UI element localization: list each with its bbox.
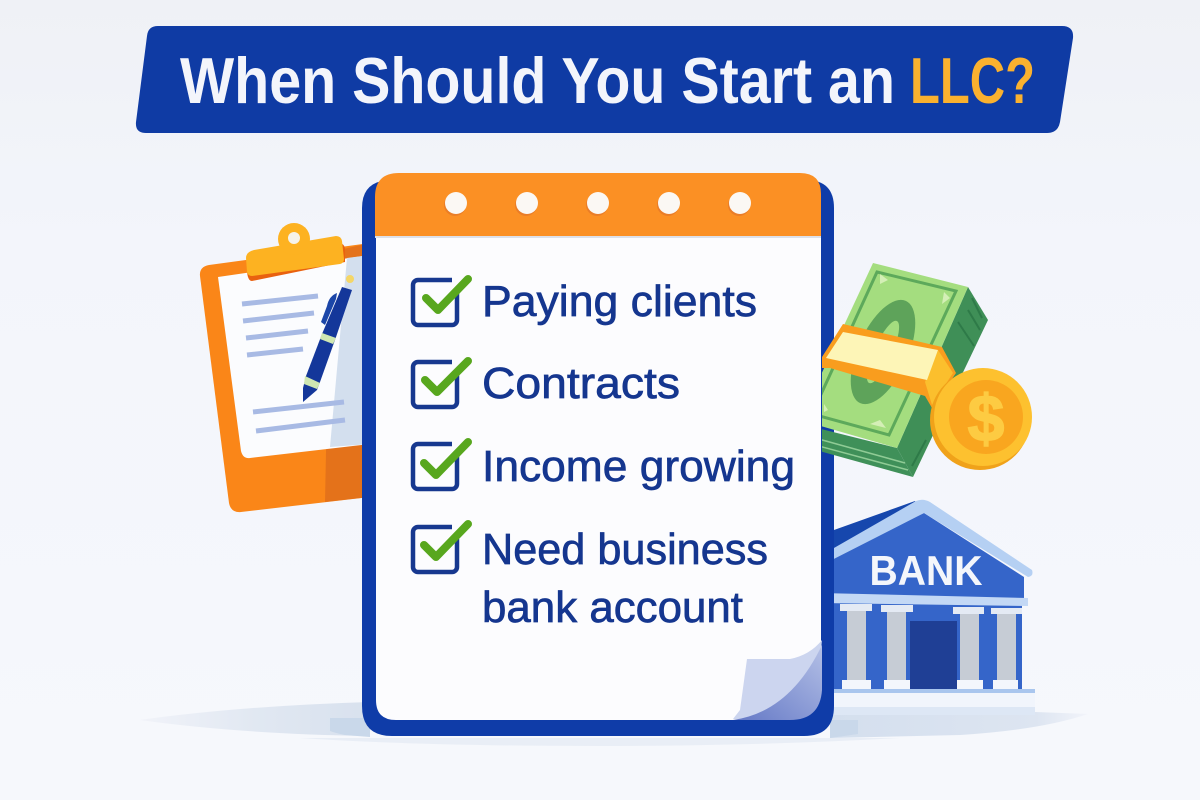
checklist item: need business bank account: Need business: [482, 525, 768, 574]
coin: [930, 368, 1032, 470]
icon: money stack: [800, 263, 1032, 477]
title banner: [136, 26, 1073, 133]
bank steps: [820, 693, 1035, 715]
checklist item: need business bank account: bank account: [482, 583, 743, 632]
clipboard clip: [246, 223, 345, 281]
columns: [847, 610, 1016, 682]
bank door: [910, 621, 957, 689]
calendar header: [375, 173, 821, 238]
infographic: [136, 26, 1074, 746]
checklist item: paying clients: Paying clients: [482, 277, 757, 326]
icon: bank: [820, 500, 1035, 715]
title text: LLC?: [910, 44, 1035, 117]
ground shadow: [140, 702, 1088, 746]
bank label: BANK: [870, 547, 982, 594]
bills: [822, 263, 988, 477]
pen: [303, 275, 354, 402]
title text: When Should You Start an: [180, 44, 895, 117]
icon: clipboard: [200, 223, 370, 512]
checklist item: need business bank account: [413, 522, 768, 632]
panel: checklist card: [362, 173, 834, 736]
checklist item: income growing: Income growing: [482, 442, 795, 491]
checklist item: contracts: [413, 357, 680, 408]
checklist item: contracts: Contracts: [482, 359, 680, 408]
page curl: [733, 640, 822, 720]
coin: $: [968, 381, 1004, 455]
money band: [815, 324, 956, 408]
